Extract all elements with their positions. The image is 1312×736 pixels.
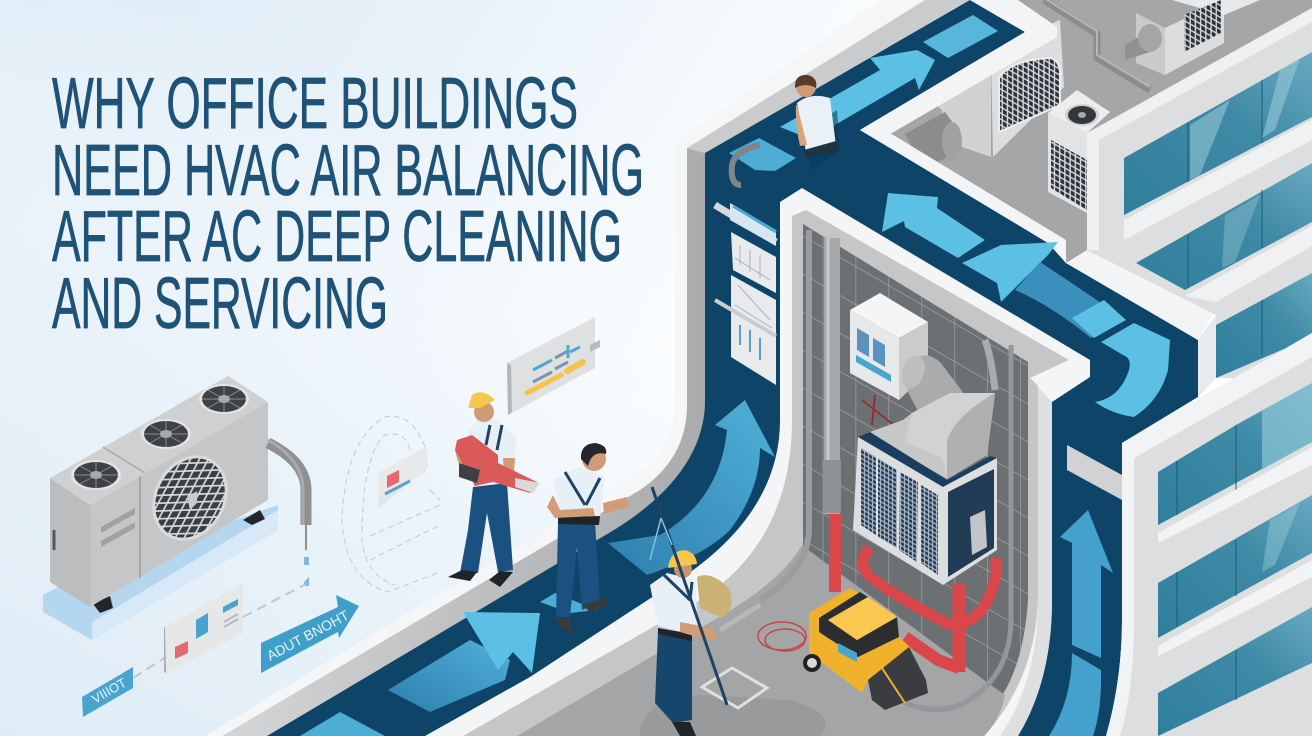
- arrow: top: [780, 50, 935, 150]
- tile: bottom left: [300, 712, 385, 736]
- windows row 3: [1216, 273, 1312, 378]
- title: NEED HVAC AIR BALANCING: [52, 131, 644, 211]
- label tag: lower left: [82, 667, 133, 717]
- panel: data card middle: [378, 447, 428, 509]
- spray markers: [304, 557, 309, 586]
- technician: center inspector: [547, 443, 629, 633]
- yellow test machine: [803, 588, 928, 710]
- chart 1: [731, 232, 776, 293]
- arrow: mid left: [882, 193, 985, 258]
- dashed flow lines: [342, 416, 440, 592]
- title: AND SERVICING: [52, 264, 388, 344]
- title: [52, 64, 644, 344]
- outdoor condenser unit: [43, 376, 309, 640]
- arrow: mid right: [962, 242, 1058, 302]
- wall charts: [715, 203, 776, 385]
- red refrigerant piping: [835, 514, 996, 672]
- wiring below box: [862, 395, 900, 430]
- air handler hood: [867, 393, 995, 479]
- unit feet: [93, 510, 265, 613]
- window row 3: [1158, 607, 1312, 736]
- arrow: curved right: [1095, 323, 1170, 417]
- tiled back wall: [803, 224, 1028, 694]
- white frame: [425, 188, 1090, 736]
- refrigerant pipe: [268, 443, 306, 525]
- concrete base pad: [43, 505, 278, 640]
- arrow: front vertical: [1060, 510, 1113, 658]
- fans: [71, 384, 249, 490]
- rear pipes: [1044, 0, 1150, 90]
- title: AFTER AC DEEP CLEANING: [52, 197, 622, 277]
- tail: mid right: [1015, 262, 1126, 338]
- airflow arrows on duct: [300, 15, 1170, 736]
- grille: [140, 444, 240, 552]
- main riser: [824, 238, 840, 514]
- red cable coil: [758, 622, 806, 651]
- navy side gray bar: [1067, 445, 1122, 500]
- tile: small triangle: [540, 593, 597, 613]
- tail: front curve: [1049, 653, 1101, 736]
- right face: [90, 402, 268, 607]
- windows row 1: [1124, 52, 1312, 215]
- label tag: lower left: VIIIOT: [89, 675, 129, 707]
- blue arrow tag: ADUT BNOHT: [264, 607, 352, 664]
- chart 2: [715, 275, 776, 385]
- tube top: [715, 205, 776, 242]
- dashed connector: [133, 584, 306, 678]
- large grille unit: [905, 20, 1064, 170]
- ledge: [1158, 560, 1312, 656]
- title: WHY OFFICE BUILDINGS: [52, 64, 578, 144]
- flex duct: [897, 352, 965, 425]
- ledge: [1124, 120, 1312, 240]
- arrow: large curved: [608, 400, 775, 575]
- tile: top right: [923, 15, 998, 58]
- arrow: lower shaft: [388, 640, 510, 712]
- floor shadow: [640, 695, 826, 736]
- rear floor: [880, 0, 1312, 262]
- tile: corner intake: [729, 138, 796, 171]
- ledge: [1185, 226, 1312, 302]
- right conduit: [905, 345, 1011, 710]
- front return face: [1000, 378, 1052, 736]
- windows row 2: [1136, 163, 1312, 290]
- technician: yellow helmet with blower: [448, 392, 540, 587]
- air handler: [853, 432, 997, 585]
- blue arrow tag: [261, 595, 359, 673]
- front mechanical room: [425, 188, 1090, 736]
- arrow: lower head: [463, 612, 540, 673]
- rear room: [880, 0, 1312, 262]
- technician: sitting top: [795, 75, 840, 170]
- duct elbow: [732, 145, 760, 185]
- right foreground building: [1106, 333, 1312, 736]
- left conduit: [760, 230, 809, 600]
- panel: data card lower: [164, 583, 243, 673]
- floor: [517, 545, 1005, 736]
- technician: front with probe: [650, 487, 760, 736]
- ledge: [1158, 447, 1312, 543]
- window row 1: [1158, 383, 1312, 525]
- left face: [50, 478, 90, 607]
- inner gray return: [463, 210, 1069, 736]
- upper right building: [1087, 8, 1312, 397]
- control box: [850, 293, 928, 400]
- small fan unit: [1048, 90, 1110, 213]
- panel: wall sign: [507, 317, 600, 415]
- inner wall ledge: [860, 0, 1214, 340]
- navy air duct channel: [267, 0, 1198, 736]
- square floor frame: [702, 668, 767, 708]
- outer wall: [205, 0, 1000, 736]
- rooftop unit far: [1125, 0, 1260, 75]
- top face: [50, 376, 268, 505]
- window row 2: [1158, 495, 1312, 638]
